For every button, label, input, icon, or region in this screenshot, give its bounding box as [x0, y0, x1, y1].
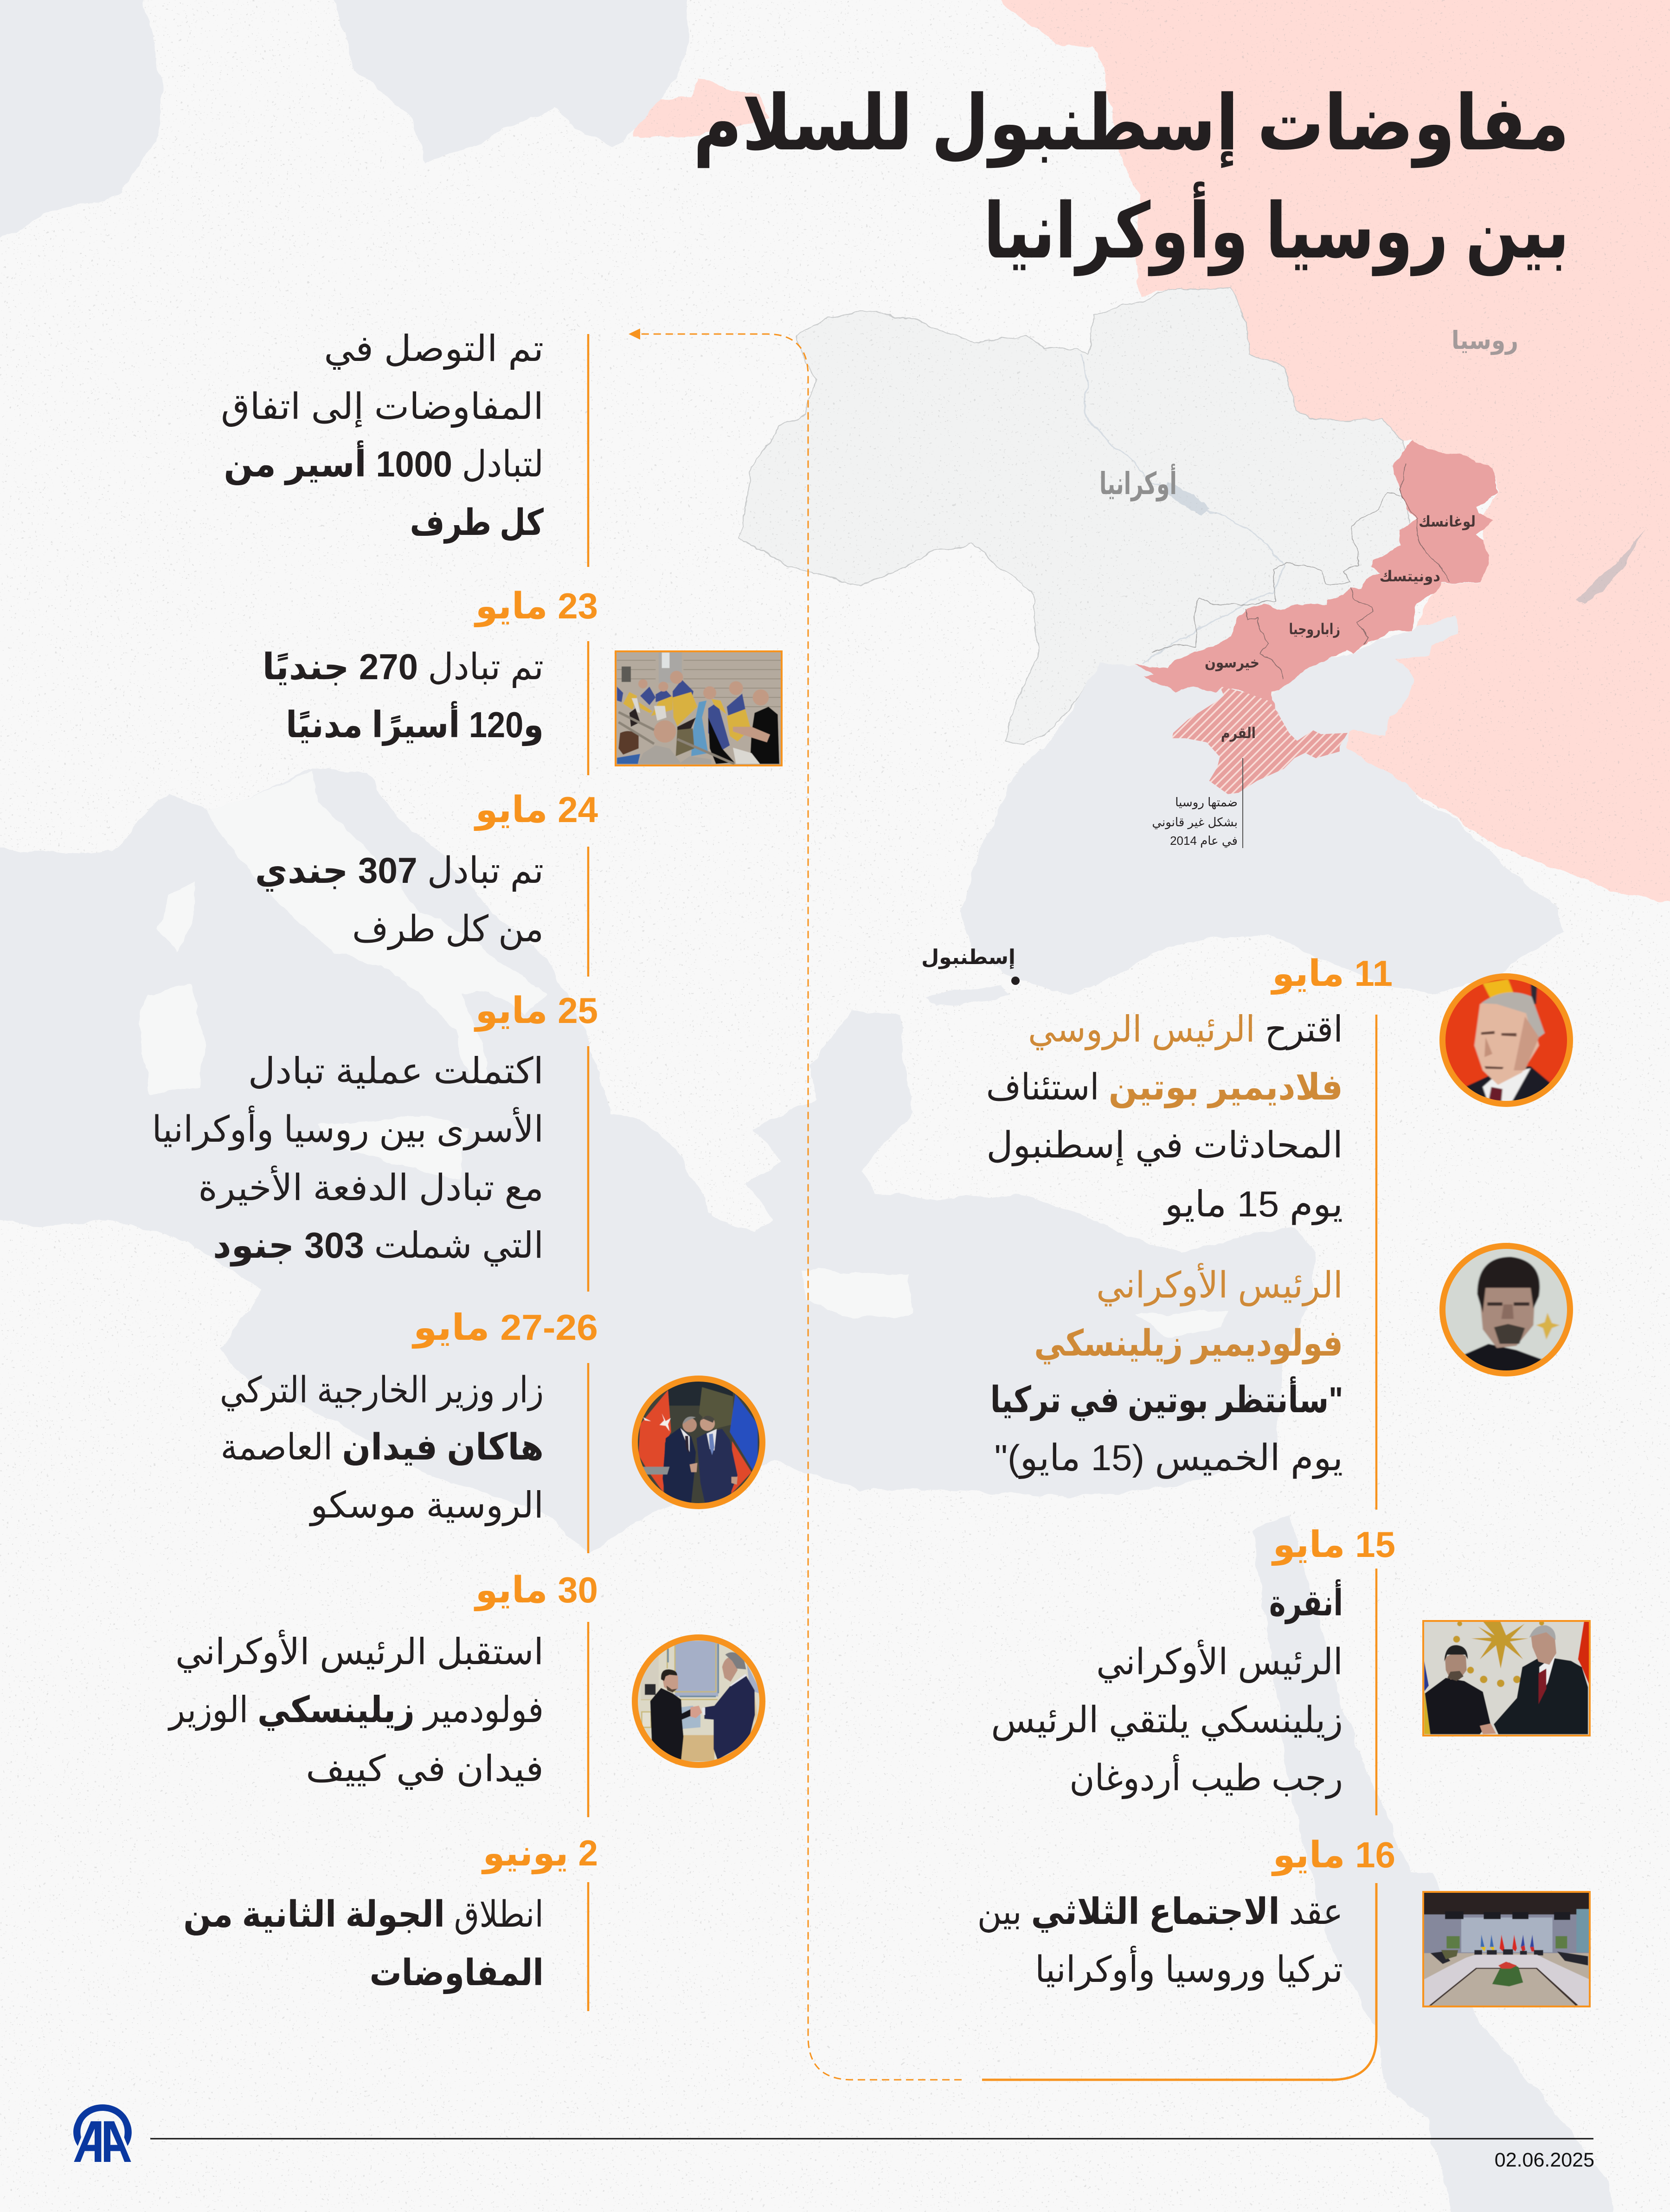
text: 26-27 may: [220, 1370, 544, 1526]
text: 30 may: فيدان في كييف: [306, 1749, 544, 1790]
photo: zelensky and fidan: [631, 1633, 767, 1769]
text: 30 may: استقبل الرئيس الأوكراني: [175, 1630, 544, 1673]
label: istanbul: [921, 946, 1020, 985]
crimea note: بشكل غير قانوني: [1152, 815, 1238, 830]
right text column: [977, 953, 1395, 1991]
text: 25 may: التي شملت 303 جنود: [213, 1226, 544, 1267]
occupied regions: [1133, 441, 1497, 714]
text: zelensky statement: يوم الخميس (15 مايو)": [995, 1438, 1343, 1479]
text: trilateral meeting: [977, 1891, 1343, 1991]
russia territory: [634, 0, 1670, 908]
text: 24 may: [255, 850, 544, 950]
ukraine territory: [739, 287, 1413, 746]
footer rule: [150, 2138, 1593, 2140]
text: 25 may: مع تبادل الدفعة الأخيرة: [198, 1166, 544, 1209]
crimea note: في عام 2014: [1170, 834, 1238, 848]
photo: zelensky: [1435, 1240, 1581, 1381]
text: ankara: [991, 1580, 1343, 1799]
text: putin proposal: فلاديمير بوتين استئناف: [986, 1067, 1343, 1109]
text: 26-27 may: هاكان فيدان العاصمة: [220, 1427, 544, 1467]
text: 24 may: تم تبادل 307 جندي: [255, 850, 544, 892]
text: 26-27 may: زار وزير الخارجية التركي: [220, 1370, 544, 1411]
text: ankara: الرئيس الأوكراني: [1096, 1640, 1343, 1683]
date: 16 may: 16 مايو: [1271, 1834, 1395, 1876]
label: donetsk: دونيتسك: [1380, 568, 1440, 585]
text: agreement: كل طرف: [410, 502, 544, 544]
text: ankara: زيلينسكي يلتقي الرئيس: [991, 1700, 1343, 1741]
date: 2 june: 2 يونيو: [481, 1833, 598, 1874]
text: 23 may: [262, 647, 544, 746]
text: zelensky statement: الرئيس الأوكراني: [1096, 1263, 1343, 1306]
label: zaporizhzhia: زاباروجيا: [1289, 621, 1340, 638]
land overlays: italy and islands: [139, 771, 912, 1318]
title: بين روسيا وأوكرانيا: [983, 181, 1569, 276]
text: ankara: رجب طيب أردوغان: [1069, 1754, 1343, 1799]
text: putin proposal: اقترح الرئيس الروسي: [1028, 1010, 1343, 1050]
text: 2 june: [183, 1894, 544, 1994]
text: putin proposal: المحادثات في إسطنبول: [986, 1125, 1343, 1167]
text: trilateral meeting: تركيا وروسيا وأوكرانيا: [1035, 1946, 1343, 1991]
text: agreement: لتبادل 1000 أسير من: [224, 440, 544, 485]
text: agreement: [221, 328, 544, 544]
text: putin proposal: يوم 15 مايو: [1163, 1184, 1343, 1226]
photo: putin: [1439, 973, 1573, 1107]
text: 26-27 may: الروسية موسكو: [308, 1485, 544, 1526]
logo: anadolu agency: [73, 2104, 132, 2162]
text: 2 june: انطلاق الجولة الثانية من: [183, 1894, 544, 1936]
date: 24 may: 24 مايو: [474, 789, 598, 831]
label: russia: روسيا: [1452, 326, 1518, 355]
label: ukraine: أوكرانيا: [1099, 463, 1177, 502]
date stamp: 02.06.2025: [1495, 2149, 1594, 2171]
date: 23 may: 23 مايو: [474, 585, 598, 627]
text: zelensky statement: [990, 1263, 1343, 1479]
crimea note: [1152, 758, 1243, 848]
photo: fidan and lavrov: [631, 1375, 767, 1511]
label: istanbul: إسطنبول: [921, 946, 1015, 969]
label: kherson: خيرسون: [1205, 655, 1259, 671]
left text column: [152, 328, 598, 1994]
text: agreement: المفاوضات إلى اتفاق: [221, 386, 544, 428]
map labels: [921, 326, 1518, 985]
text: trilateral meeting: عقد الاجتماع الثلاثي بين: [977, 1891, 1343, 1933]
label: luhansk: لوغانسك: [1419, 514, 1476, 530]
text: 25 may: الأسرى بين روسيا وأوكرانيا: [152, 1106, 544, 1151]
timeline connector: [588, 328, 1376, 2080]
text: putin proposal: [986, 1010, 1343, 1226]
date: 15 may: 15 مايو: [1271, 1524, 1395, 1566]
dnieper river: [1083, 355, 1284, 663]
crimea: [1172, 686, 1348, 794]
text: zelensky statement: "سأنتظر بوتين في تركيا: [990, 1376, 1343, 1421]
photo: prisoners exchange: [615, 650, 783, 766]
text: agreement: تم التوصل في: [324, 328, 544, 370]
text: 24 may: من كل طرف: [352, 909, 544, 950]
text: 23 may: و120 أسيرًا مدنيًا: [286, 701, 544, 746]
text: ankara: أنقرة: [1269, 1580, 1343, 1624]
text: 25 may: [152, 1050, 544, 1267]
footer: [73, 2104, 1594, 2171]
text: 2 june: المفاوضات: [370, 1952, 544, 1994]
text: zelensky statement: فولوديمير زيلينسكي: [1034, 1323, 1343, 1364]
date: 25 may: 25 مايو: [474, 990, 598, 1032]
text: 25 may: اكتملت عملية تبادل: [248, 1050, 544, 1091]
text: 30 may: فولودمير زيلينسكي الوزير: [167, 1690, 544, 1731]
date: 11 may: 11 مايو: [1270, 953, 1393, 995]
text: 23 may: تم تبادل 270 جنديًا: [262, 647, 544, 688]
label: crimea: القرم: [1221, 725, 1256, 742]
photo: trilateral meeting: [1422, 1891, 1591, 2007]
text: 30 may: [167, 1630, 544, 1790]
crimea note: ضمتها روسيا: [1175, 795, 1238, 810]
photo: zelensky and erdogan: [1422, 1620, 1591, 1736]
title: [693, 80, 1569, 276]
date: 30 may: 30 مايو: [474, 1569, 598, 1611]
date: 26-27 may: 27-26 مايو: [411, 1307, 598, 1349]
title: مفاوضات إسطنبول للسلام: [693, 80, 1569, 168]
